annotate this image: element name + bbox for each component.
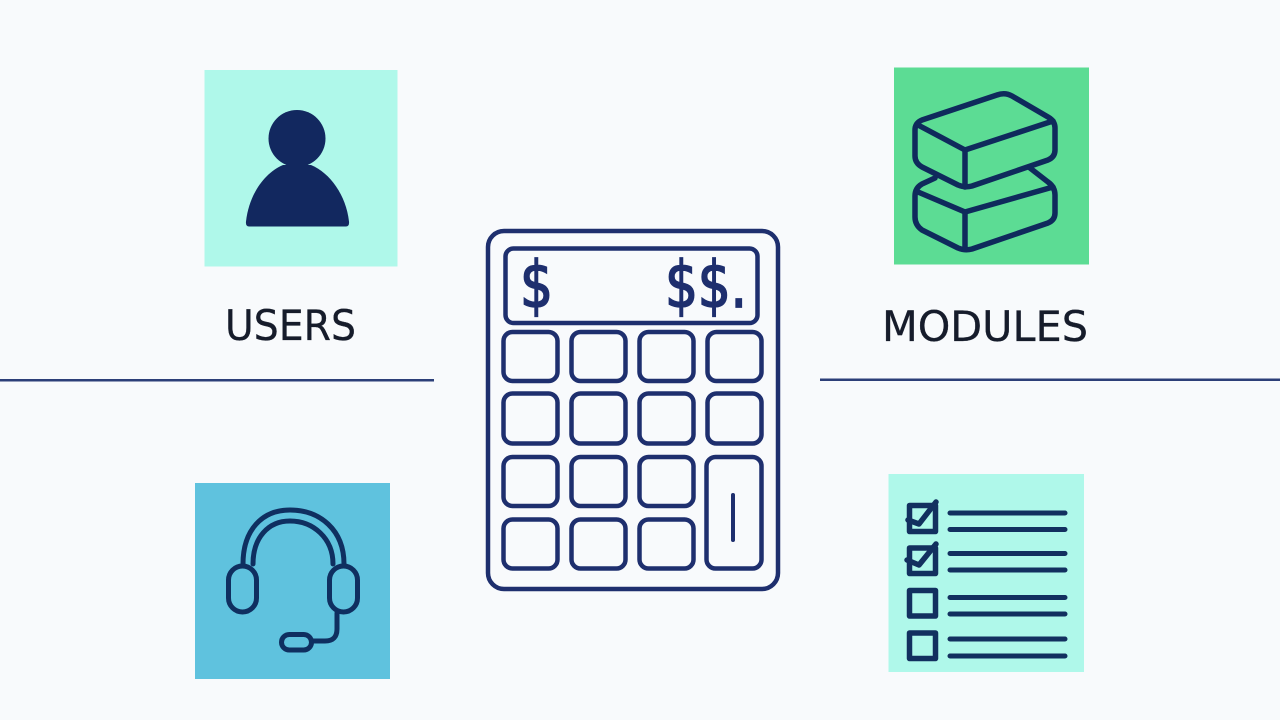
divider right: [820, 378, 1280, 381]
calculator keys: [504, 332, 762, 568]
support tile: [195, 483, 390, 679]
users tile: [204, 70, 398, 266]
panel: support: [195, 483, 390, 679]
calculator body: [488, 231, 778, 589]
panel: calculator: [488, 231, 778, 589]
calculator display: [506, 248, 758, 323]
icon: stacked bricks: [915, 94, 1055, 250]
panel: users: [204, 70, 398, 350]
divider left: [0, 379, 434, 382]
panel: checklist: [888, 474, 1084, 672]
display left dollar sign: $: [520, 248, 553, 322]
checklist tile: [888, 474, 1084, 672]
display right value: $$.: [665, 248, 747, 322]
panel: modules: [882, 68, 1089, 351]
users label: USERS: [225, 301, 356, 350]
icon: headset: [228, 510, 358, 650]
icon: checklist: [907, 502, 1065, 658]
icon: user silhouette: [246, 110, 349, 226]
modules label: MODULES: [882, 302, 1088, 351]
modules tile: [894, 68, 1089, 264]
